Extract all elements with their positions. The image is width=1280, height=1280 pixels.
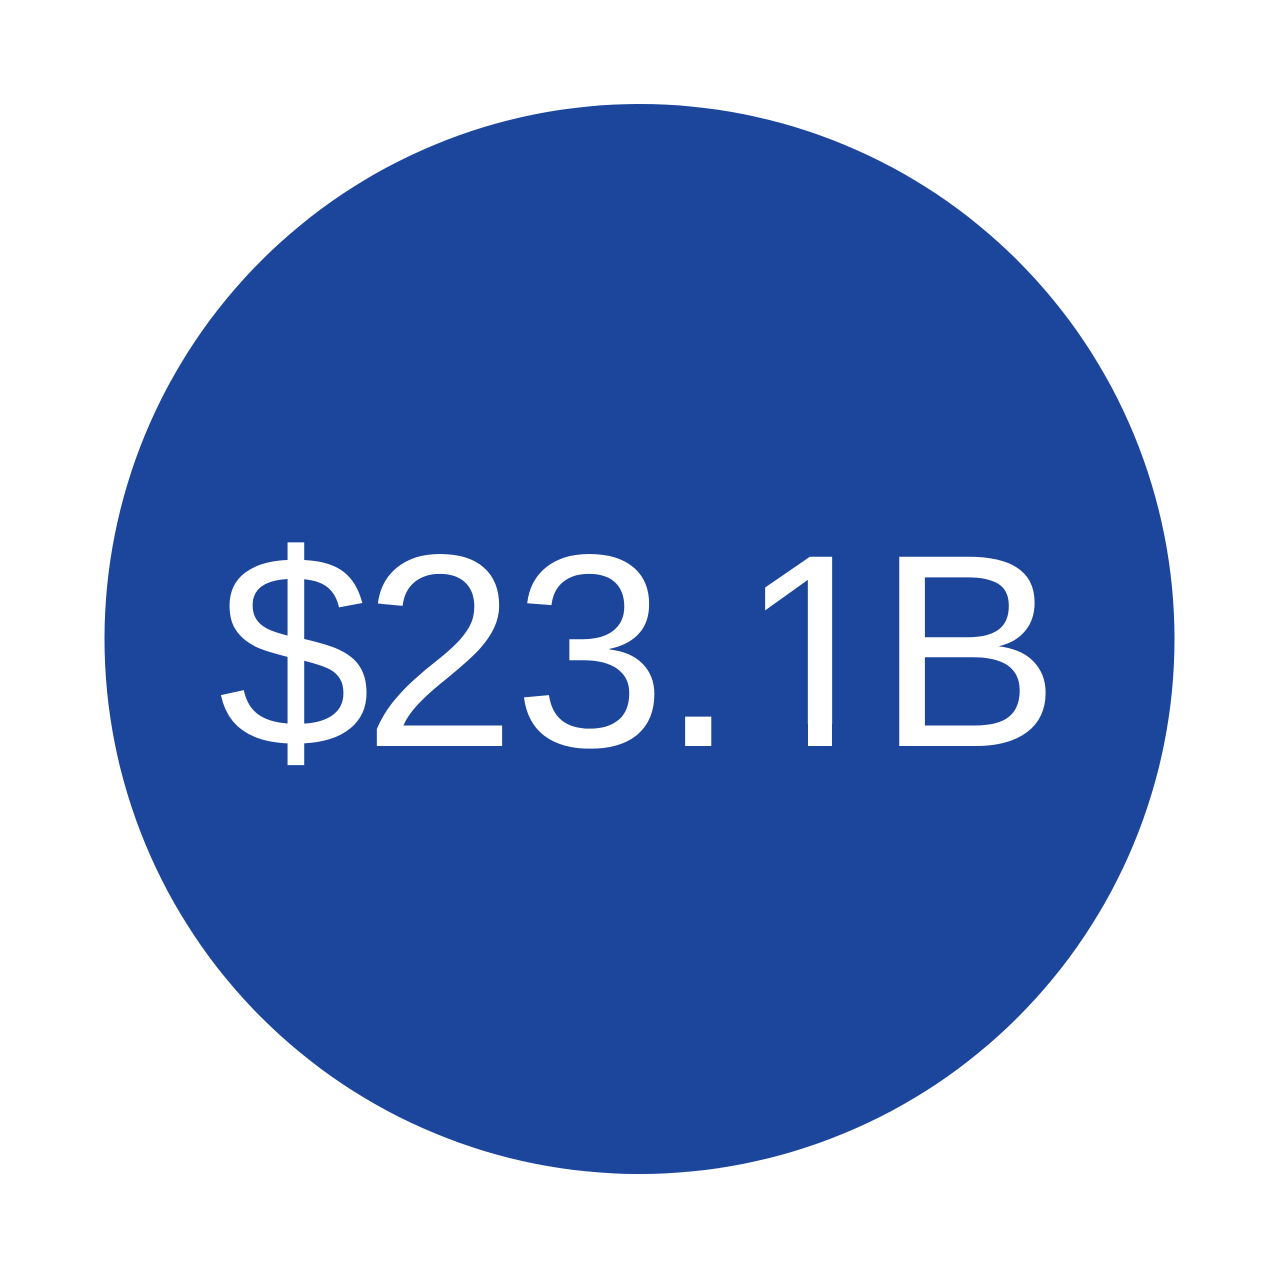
blue circle bbox=[104, 104, 1174, 1174]
value text: $23.1B bbox=[218, 498, 1060, 805]
